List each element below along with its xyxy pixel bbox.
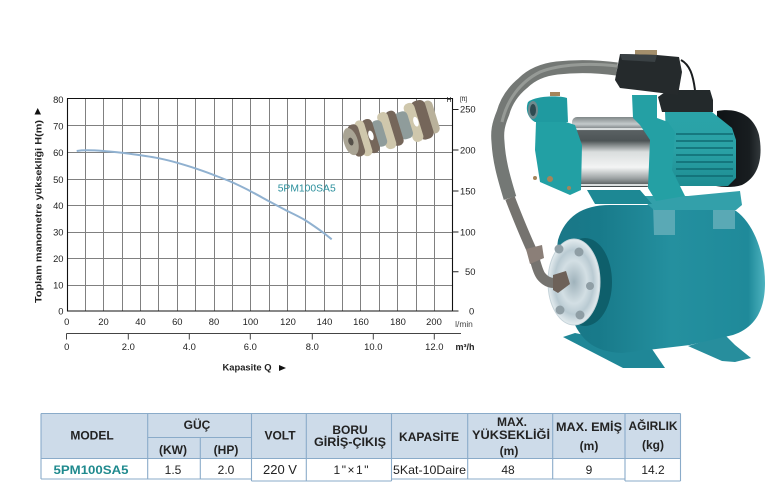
motor fins [676, 134, 733, 176]
flow axis l/min: 180 [390, 316, 406, 327]
table headers: (m) [500, 444, 518, 458]
stainless casing [572, 117, 652, 187]
flow axis l/min: 0 [64, 316, 69, 327]
right axis [446, 96, 476, 316]
flow axis l/min: 140 [317, 316, 332, 327]
left axis labels: 20 [53, 253, 64, 264]
table values [54, 462, 665, 477]
table headers: MAX. [497, 415, 527, 429]
flow axis l/min: 60 [172, 316, 183, 327]
flow axis m3/h: 0 [64, 341, 69, 352]
table values: 48 [501, 463, 515, 477]
hose nut [553, 271, 570, 293]
flow axis l/min: l/min [455, 319, 473, 329]
left axis labels: 10 [53, 280, 64, 290]
flow axis l/min: 20 [98, 316, 109, 327]
flange shadow [558, 238, 612, 326]
flow axis m3/h: m³/h [456, 342, 474, 352]
flow axis m3/h: 2.0 [122, 341, 135, 352]
volute [535, 120, 582, 195]
flow axis m3/h: 12.0 [425, 341, 443, 352]
motor body [665, 112, 736, 186]
right axis: 150 [460, 186, 476, 196]
right axis: 100 [460, 226, 476, 238]
fan cover [716, 110, 761, 187]
left axis labels: 40 [53, 200, 64, 211]
impeller stack photo [338, 96, 442, 163]
table headers: BORU [332, 423, 368, 437]
flow axis m3/h: 4.0 [183, 341, 196, 352]
pump photo illustration [498, 50, 765, 368]
table lines [41, 414, 680, 481]
table headers: AĞIRLIK [628, 418, 678, 433]
table values: 2.0 [218, 463, 235, 477]
right axis: [ft] [460, 96, 467, 103]
flow axis m3/h: 10.0 [364, 341, 382, 352]
left axis labels [53, 94, 64, 316]
table values: 1.5 [165, 463, 182, 477]
tank body [557, 205, 765, 353]
performance chart [34, 94, 476, 374]
flow axis m3/h [64, 334, 474, 352]
table headers: GİRİŞ-ÇIKIŞ [314, 434, 386, 449]
table values: 5Kat-10Daire [393, 463, 466, 477]
table values: 14.2 [641, 463, 665, 477]
table values: 1"×1" [334, 463, 368, 477]
right axis: 0 [469, 306, 474, 316]
pressure switch [615, 50, 695, 95]
flow axis l/min: 40 [135, 316, 146, 327]
left axis labels: 50 [53, 174, 64, 185]
table headers [70, 415, 678, 458]
flow axis l/min: 100 [243, 316, 258, 327]
flow axis m3/h: 6.0 [244, 341, 257, 352]
left axis labels: 80 [53, 94, 64, 105]
volute bolts [533, 176, 571, 190]
right axis: 200 [460, 144, 476, 156]
header background [41, 414, 680, 458]
pump base plate [618, 191, 742, 210]
hose collar [526, 245, 544, 264]
table headers: (m) [580, 439, 598, 453]
tank saddle [653, 203, 735, 235]
right axis: 50 [465, 266, 475, 277]
pump bracket and neck [632, 95, 685, 201]
right axis: H [446, 97, 452, 104]
braided hose [498, 64, 617, 283]
pump curve [77, 150, 332, 239]
left axis title: Toplam manometre yüksekliği H(m) [34, 120, 44, 303]
table headers: MAX. EMİŞ [556, 419, 622, 434]
flow axis l/min: 200 [426, 316, 442, 327]
flow axis m3/h: 8.0 [306, 341, 319, 352]
left axis labels: 30 [53, 226, 64, 238]
table values: 220 V [263, 462, 297, 477]
terminal box [658, 90, 713, 112]
inlet port [527, 92, 568, 122]
table headers: MODEL [70, 428, 114, 442]
chart grid [67, 98, 452, 311]
table headers: (kg) [642, 438, 664, 452]
pump mount [587, 190, 652, 204]
table values: 5PM100SA5 [54, 463, 129, 477]
table headers: VOLT [264, 428, 296, 442]
chart frame [68, 98, 452, 311]
x axis title: Kapasite Q [222, 362, 272, 374]
curve label: 5PM100SA5 [278, 184, 336, 194]
table headers: YÜKSEKLİĞİ [472, 427, 550, 442]
table headers: (KW) [159, 443, 187, 457]
right axis: 250 [460, 104, 476, 114]
left axis labels: 0 [58, 306, 64, 316]
flow axis l/min: 120 [280, 316, 296, 327]
table headers: (HP) [214, 443, 238, 457]
spec table [41, 414, 680, 481]
table headers: GÜÇ [184, 417, 211, 432]
flow axis l/min [64, 316, 473, 329]
tank feet [563, 333, 751, 368]
flow axis l/min: 160 [353, 316, 369, 327]
table headers: KAPASİTE [399, 429, 459, 444]
tank flange [548, 239, 600, 325]
flow axis l/min: 80 [209, 316, 219, 327]
left axis labels: 60 [53, 147, 64, 158]
left axis labels: 70 [53, 120, 64, 132]
table values: 9 [586, 463, 593, 477]
tie rods [574, 129, 648, 185]
